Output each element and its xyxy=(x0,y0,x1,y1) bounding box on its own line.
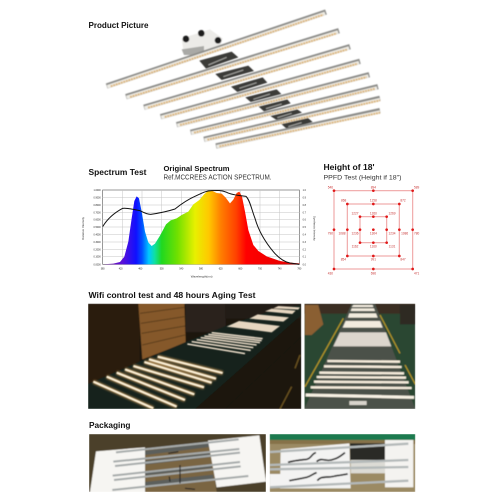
driver box highlights xyxy=(208,57,302,127)
left axis labels: 0.9000 xyxy=(94,197,101,199)
left axis labels: 0.3000 xyxy=(94,242,101,244)
spectrum area xyxy=(103,191,299,264)
x axis labels xyxy=(101,268,302,270)
PPFD values: 1269 xyxy=(388,211,396,215)
x axis title: Wavelength(nm) xyxy=(191,274,213,278)
spectrum chart xyxy=(81,190,316,278)
cables xyxy=(288,453,348,481)
dark driver boxes xyxy=(199,52,313,129)
right axis labels: 0.8 xyxy=(303,205,307,207)
dark bars in the centre xyxy=(145,445,213,484)
PPFD values: 872 xyxy=(400,199,406,203)
foam blocks xyxy=(90,447,145,492)
left axis labels: 0.4000 xyxy=(94,235,101,237)
heading: height of 18: Height of 18' xyxy=(324,163,375,172)
PPFD values: 1234 xyxy=(388,231,396,235)
left axis labels: 0.0000 xyxy=(94,264,101,266)
right axis labels: 0.2 xyxy=(303,249,307,251)
plot frame and gridlines xyxy=(103,190,299,264)
x axis labels: 780 xyxy=(297,268,302,270)
PPFD values: 546 xyxy=(328,186,333,190)
nested squares xyxy=(334,191,413,269)
right axis labels: 0.1 xyxy=(303,257,307,259)
right axis labels: 0.0 xyxy=(303,264,307,266)
left axis labels: 0.6000 xyxy=(94,220,101,222)
text: PPFD test: PPFD Test (Height if 18") xyxy=(324,174,402,182)
x axis labels: 460 xyxy=(138,268,143,270)
PPFD values: 1227 xyxy=(351,211,359,215)
right axis labels: 0.5 xyxy=(303,227,307,229)
left axis labels: 1.0000 xyxy=(94,190,101,192)
PPFD values: 430 xyxy=(328,271,333,275)
distant light clusters xyxy=(227,306,300,332)
heading: packaging: Packaging xyxy=(89,421,131,430)
x axis labels: 580 xyxy=(199,268,204,270)
measurement points xyxy=(333,189,414,270)
PPFD values: 1158 xyxy=(370,199,377,203)
right axis title: Synthesis Intensity xyxy=(312,216,316,241)
left axis labels xyxy=(94,190,101,266)
near light bars glow xyxy=(93,357,223,408)
PPFD values: 471 xyxy=(414,271,420,275)
PPFD values xyxy=(328,185,420,275)
x axis labels: 660 xyxy=(238,268,243,270)
cables xyxy=(168,452,195,489)
text: reference: Ref.MCCREES ACTION SPECTRUM. xyxy=(164,174,272,182)
PPFD values: 696 xyxy=(371,271,376,275)
left axis labels: 0.5000 xyxy=(94,227,101,229)
right axis labels: 1.0 xyxy=(303,190,307,192)
x axis labels: 420 xyxy=(119,268,123,270)
PPFD values: 991 xyxy=(371,258,376,262)
right axis labels: 0.4 xyxy=(303,235,307,237)
room background xyxy=(88,304,301,409)
PPFD values: 790 xyxy=(328,231,333,235)
x axis labels: 540 xyxy=(179,268,184,270)
left axis labels: 0.8000 xyxy=(94,205,101,207)
product photo: LED grow light bars xyxy=(107,12,380,147)
PPFD values: 868 xyxy=(341,199,347,203)
right axis labels: 0.7 xyxy=(303,212,307,214)
PPFD values: 1304 xyxy=(370,231,377,235)
photo: packaging, right xyxy=(270,434,415,492)
right axis labels xyxy=(303,190,307,266)
PPFD values: 1160 xyxy=(370,245,377,249)
PPFD values: 1162 xyxy=(352,245,359,249)
foam inserts xyxy=(280,443,351,488)
PPFD values: 1131 xyxy=(389,245,396,249)
heading: spectrum test: Spectrum Test xyxy=(88,168,147,177)
action spectrum line xyxy=(103,190,299,264)
PPFD values: 894 xyxy=(371,185,376,189)
bars xyxy=(112,439,248,490)
heading: product picture: Product Picture xyxy=(88,21,149,30)
PPFD values: 854 xyxy=(341,258,346,262)
left axis labels: 0.7000 xyxy=(94,212,101,214)
middle light cluster xyxy=(187,333,263,354)
x axis labels: 500 xyxy=(160,268,164,270)
driver box: white top unit xyxy=(182,29,223,55)
PPFD values: 1088 xyxy=(338,231,346,235)
PPFD values: 1086 xyxy=(401,231,408,235)
x axis labels: 620 xyxy=(219,268,223,270)
bars xyxy=(107,12,380,147)
photo: packaging, left xyxy=(89,434,266,492)
heading: original spectrum: Original Spectrum xyxy=(164,166,230,173)
x axis labels: 700 xyxy=(258,268,263,270)
right axis labels: 0.9 xyxy=(303,197,307,199)
x axis labels: 740 xyxy=(278,268,282,270)
x axis labels: 380 xyxy=(101,268,105,270)
heading: wifi control test: Wifi control test and 48 hours Aging Test xyxy=(88,291,256,300)
PPFD values: 589 xyxy=(414,186,420,190)
left axis labels: 0.1000 xyxy=(94,257,101,259)
PPFD values: 1260 xyxy=(370,211,377,215)
bars xyxy=(270,444,408,487)
PPFD values: 1236 xyxy=(351,231,359,235)
photo: aging test, aisle view xyxy=(304,304,415,409)
PPFD values: 780 xyxy=(414,231,420,235)
photo: aging test, table view xyxy=(88,304,301,409)
PPFD diagram xyxy=(328,185,420,275)
left axis title: Relative Intensity xyxy=(81,216,85,240)
PPFD values: 847 xyxy=(400,258,406,262)
right axis labels: 0.6 xyxy=(303,220,307,222)
near light bars xyxy=(93,357,223,408)
right axis labels: 0.3 xyxy=(303,242,307,244)
left axis labels: 0.2000 xyxy=(94,249,101,251)
